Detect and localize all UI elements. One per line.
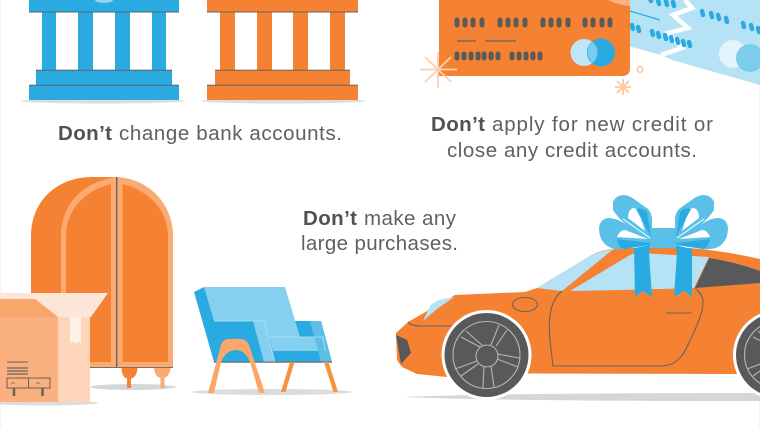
side window <box>570 253 709 291</box>
body lines <box>408 288 703 366</box>
text: bank accounts caption: Don’t <box>58 122 112 145</box>
icon: small ring <box>637 67 643 72</box>
front wheel <box>442 310 532 400</box>
icon: cardboard box <box>0 293 108 406</box>
text: bank accounts caption: change bank accounts. <box>119 122 342 145</box>
icon: small spark <box>615 79 631 95</box>
text: credit caption: Don’t <box>431 113 485 136</box>
grille <box>396 335 411 364</box>
bow left loops <box>599 195 652 249</box>
rear wheel <box>733 310 760 400</box>
car shadow <box>402 393 760 401</box>
bow right loops <box>675 195 728 249</box>
icon: large spark <box>420 52 457 88</box>
text: credit caption: apply for new credit or <box>492 113 713 136</box>
icon: armchair <box>192 287 352 395</box>
text: purchases caption: large purchases. <box>301 232 458 255</box>
text: purchases caption: make any <box>364 207 457 230</box>
bow knot <box>651 228 676 248</box>
icon: wardrobe <box>31 177 176 390</box>
text: credit caption: close any credit accounts. <box>447 139 697 162</box>
ribbon tails <box>634 245 652 297</box>
icon: torn blue credit card <box>628 0 760 85</box>
icon: orange car with bow <box>396 195 760 401</box>
text: purchases caption: Don’t <box>303 207 357 230</box>
car body <box>396 248 760 377</box>
icon: orange credit card <box>439 0 630 76</box>
icon: blue bank <box>21 0 185 104</box>
icon: orange bank <box>201 0 365 104</box>
rear window <box>695 258 760 288</box>
headlight <box>423 297 454 321</box>
windshield <box>537 248 616 291</box>
